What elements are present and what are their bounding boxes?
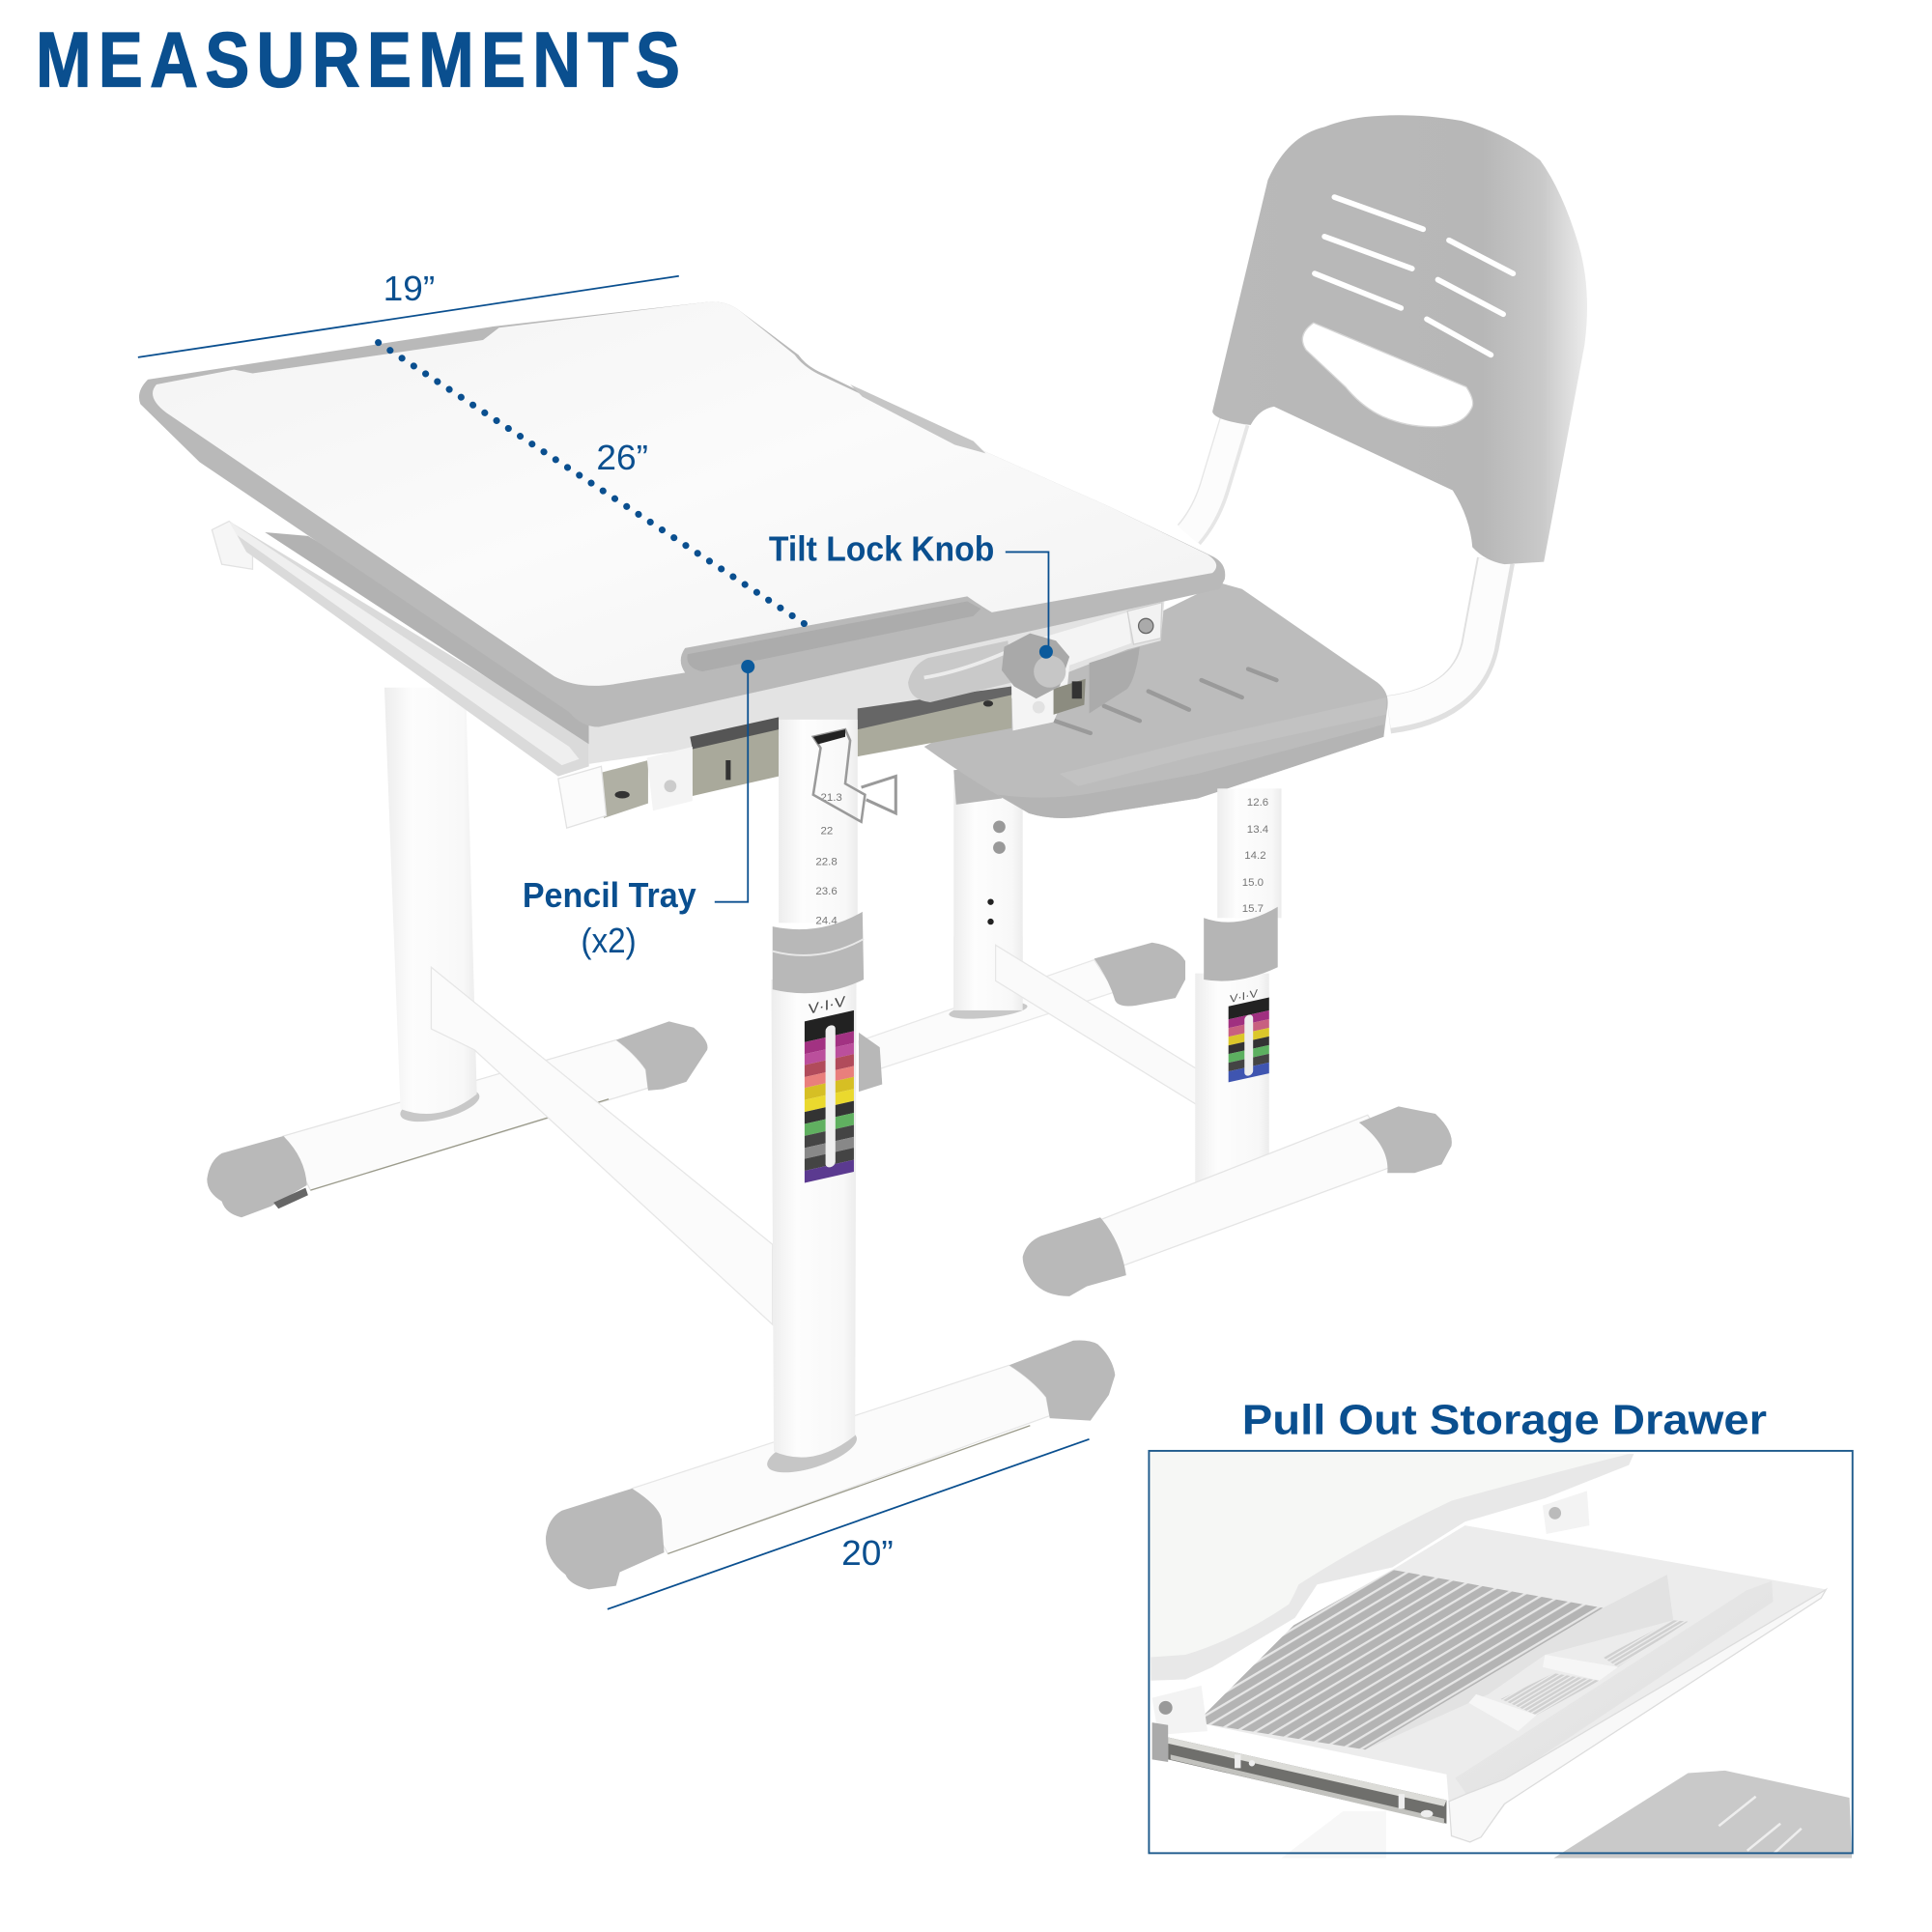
tilt lock knob bbox=[1002, 634, 1069, 698]
backrest handle hole bbox=[1302, 323, 1473, 427]
dimension: base 20 inches bbox=[608, 1439, 1090, 1609]
title: MEASUREMENTS bbox=[36, 15, 680, 102]
inset desk top bbox=[1150, 1452, 1634, 1681]
desk height scale bbox=[815, 792, 842, 927]
chair height scale: 13.4 bbox=[1247, 824, 1269, 836]
tilt arc handle bbox=[908, 640, 1011, 702]
inset heading: Pull Out Storage Drawer bbox=[1242, 1398, 1767, 1444]
height sticker bbox=[805, 992, 854, 1182]
inset seat bbox=[1553, 1771, 1852, 1858]
inset long ridge bbox=[1455, 1580, 1773, 1794]
chair height scale: 14.2 bbox=[1244, 850, 1266, 862]
desk front leg bbox=[771, 720, 895, 1458]
chair backrest bbox=[1212, 115, 1587, 564]
callout: pencil tray bbox=[523, 660, 754, 960]
dimension: depth 26 inches dotted line: 26” bbox=[596, 439, 648, 477]
desk under frame bbox=[589, 601, 1164, 764]
height adjustment screws bbox=[987, 820, 1006, 924]
desk height scale: 23.6 bbox=[815, 886, 838, 897]
rear cross bar bbox=[996, 945, 1198, 1105]
desk height scale: 22.8 bbox=[815, 856, 838, 867]
desk top white surface bbox=[153, 301, 1216, 686]
chair front leg bbox=[1189, 788, 1282, 1210]
inset frame bbox=[1149, 1451, 1853, 1853]
inset outer rim bbox=[1449, 1589, 1826, 1842]
inset leg ghost bbox=[1282, 1811, 1386, 1858]
dimension: width 19 inches: 19” bbox=[384, 270, 435, 308]
desk height scale: 22 bbox=[820, 826, 833, 838]
chair height sticker bbox=[1229, 984, 1269, 1082]
inset metal slide rail bbox=[1152, 1722, 1446, 1824]
chair height scale: 12.6 bbox=[1247, 797, 1268, 809]
inset front bracket bbox=[1152, 1686, 1208, 1735]
drawer slide rails bbox=[558, 686, 1011, 828]
drawer, closed bbox=[212, 522, 589, 777]
chair height sticker: V·I·V bbox=[1230, 986, 1259, 1006]
desk height scale: 21.3 bbox=[820, 792, 842, 804]
desk height scale: 24.4 bbox=[815, 916, 838, 927]
desk left leg and foot bbox=[207, 688, 707, 1217]
dimension: width 19 inches bbox=[138, 270, 679, 357]
desk top grey lip bbox=[139, 301, 1225, 727]
inset tray striped floor bbox=[1197, 1570, 1603, 1749]
backrest slots bbox=[1315, 197, 1513, 355]
desk front foot bbox=[546, 1341, 1115, 1589]
front pencil tray bbox=[687, 601, 980, 671]
callout: pencil tray: Pencil Tray bbox=[523, 876, 696, 915]
desk cross bar bbox=[431, 967, 773, 1324]
callout: pencil tray: (x2) bbox=[581, 922, 637, 960]
chair height collar bbox=[1204, 907, 1278, 981]
tilt mechanism bbox=[908, 603, 1162, 730]
inset compartment floors bbox=[1603, 1620, 1688, 1667]
chair rear leg and desk rear foot bbox=[859, 764, 1185, 1092]
desk top bbox=[139, 301, 1225, 727]
chair height scale: 15.7 bbox=[1242, 903, 1264, 915]
height collar bbox=[773, 912, 864, 993]
dimension: depth 26 inches dotted line bbox=[379, 343, 806, 625]
chair height scale bbox=[1242, 797, 1269, 915]
callout: tilt lock knob: Tilt Lock Knob bbox=[769, 529, 994, 568]
inset rear bracket bbox=[1543, 1491, 1589, 1534]
inset tray body bbox=[1197, 1525, 1826, 1837]
side tray sliver bbox=[850, 384, 985, 453]
seat slots bbox=[1055, 669, 1276, 733]
callout: tilt lock knob bbox=[769, 529, 1053, 659]
chair back tubes bbox=[1188, 421, 1495, 715]
tilt bolt bracket bbox=[1127, 603, 1162, 644]
dimension: base 20 inches: 20” bbox=[841, 1534, 894, 1573]
inset tray divider one bbox=[1365, 1575, 1673, 1749]
chair foot bbox=[1023, 1106, 1452, 1296]
chair seat bbox=[924, 582, 1388, 818]
inset: pull out storage drawer bbox=[1149, 1451, 1853, 1858]
chair height scale: 15.0 bbox=[1242, 877, 1264, 889]
headphone hook bbox=[813, 729, 895, 822]
height sticker: V·I·V bbox=[809, 994, 845, 1017]
